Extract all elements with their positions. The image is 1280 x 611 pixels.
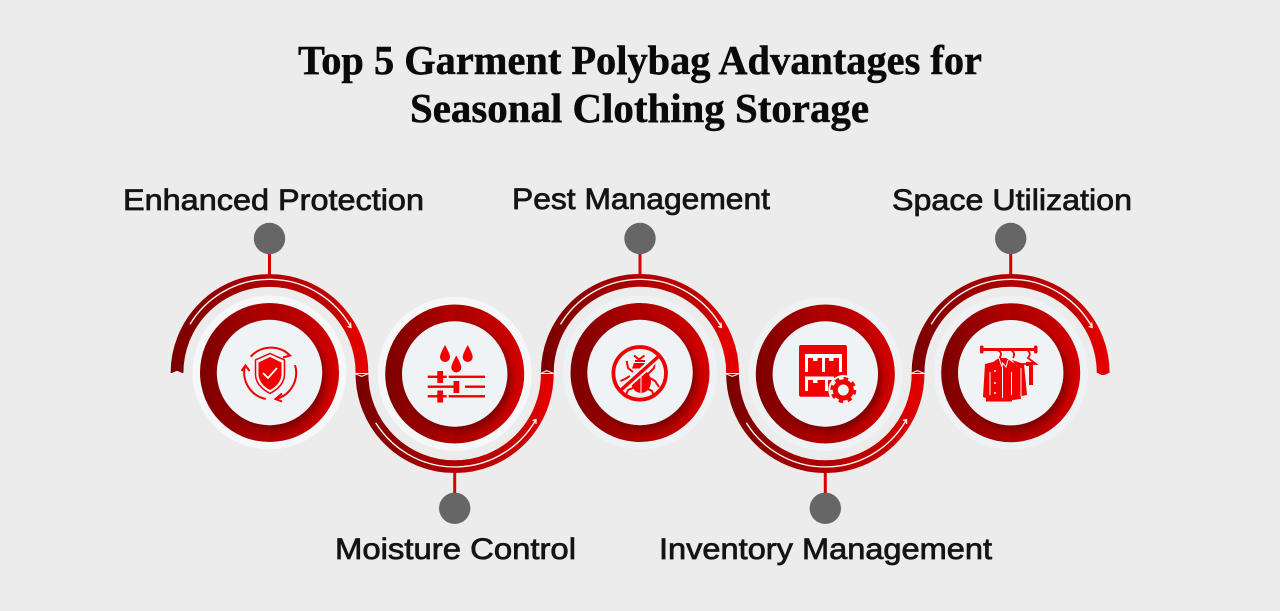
icon: water drops and sliders <box>428 345 485 402</box>
circle badge 1 <box>192 296 346 450</box>
ribbon arc 5 <box>918 279 1110 375</box>
connector pin 3 <box>624 223 656 275</box>
title: Top 5 Garment Polybag Advantages for <box>298 37 982 83</box>
connector pin 1 <box>254 223 285 275</box>
icon: clothes on rack <box>980 346 1038 402</box>
label: Enhanced Protection: Enhanced Protection <box>123 184 424 217</box>
connector pin 5 <box>995 223 1026 275</box>
label: Pest Management: Pest Management <box>512 183 771 216</box>
icon: shield with cycle arrows <box>242 348 296 402</box>
circle badge 2 <box>378 297 532 451</box>
circle badge 4 <box>748 297 902 451</box>
wavy ribbon path <box>171 279 1110 467</box>
connector pin 2 <box>439 472 470 524</box>
ribbon arc 1 <box>171 279 362 376</box>
label: Space Utilization: Space Utilization <box>892 184 1132 217</box>
title: Seasonal Clothing Storage <box>410 85 869 131</box>
ribbon arc 3 <box>547 279 733 373</box>
label: Moisture Control: Moisture Control <box>335 533 576 566</box>
icon: no pests beetle <box>613 347 666 400</box>
title <box>298 37 982 131</box>
ribbon arc 2 <box>362 374 547 467</box>
icon: warehouse shelves with gear <box>799 345 858 405</box>
ribbon arc 4 <box>733 374 918 467</box>
connector pin 4 <box>810 472 841 524</box>
label: Inventory Management: Inventory Management <box>659 533 993 566</box>
circle badge 5 <box>934 296 1088 450</box>
circle badge 3 <box>563 296 717 450</box>
